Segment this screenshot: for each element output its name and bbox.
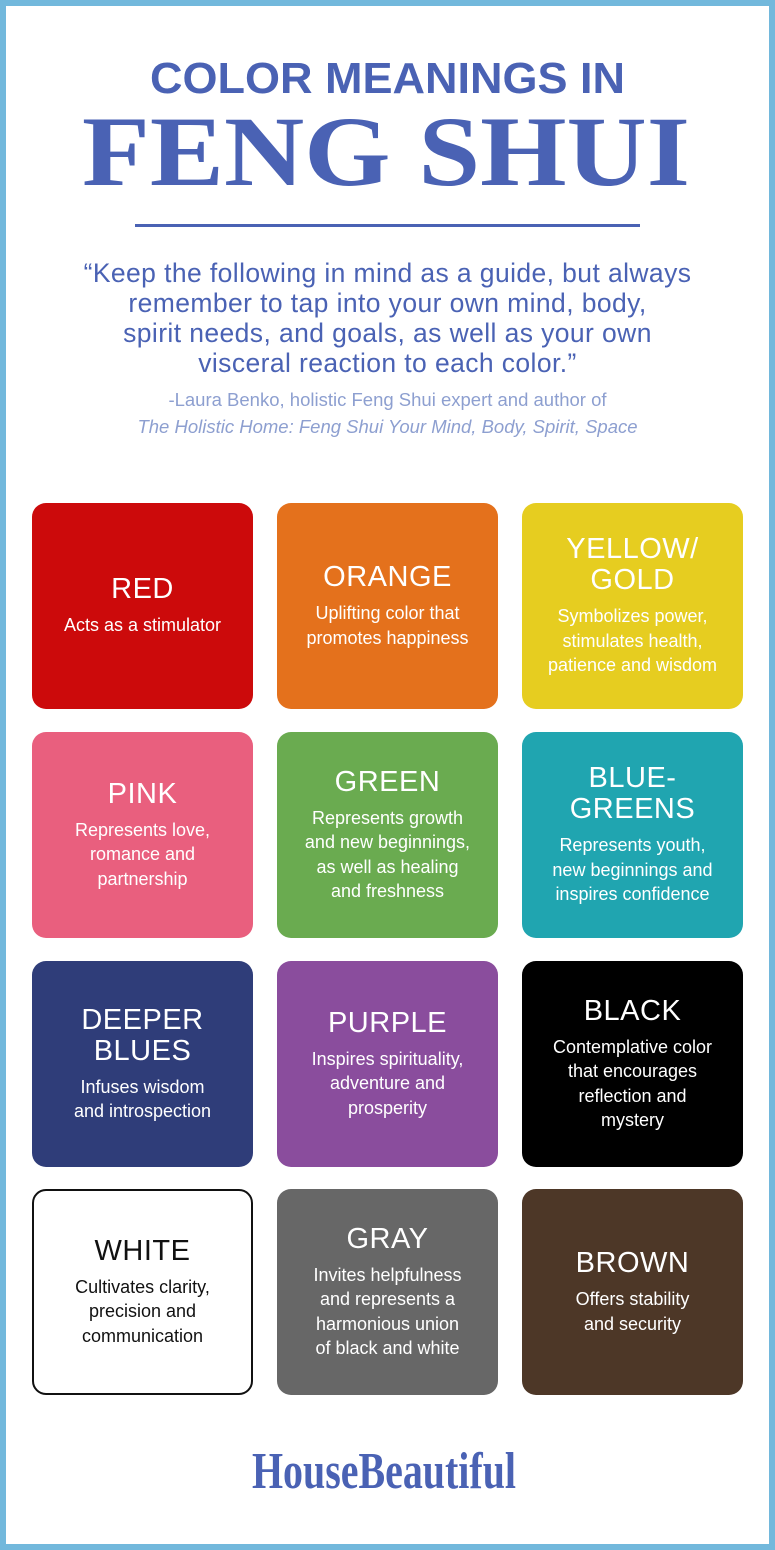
card: orange (277, 503, 498, 709)
card: black (522, 961, 743, 1167)
card: pink: partnership (97, 869, 188, 889)
divider (135, 224, 640, 227)
card: purple (277, 961, 498, 1167)
card: brown: BROWN (576, 1247, 689, 1279)
card: brown: Offers stability (576, 1289, 689, 1309)
card: gray: and represents a (320, 1289, 455, 1309)
card: blue-greens: BLUE- (589, 762, 676, 794)
card: yellow: YELLOW/ (566, 533, 699, 565)
card: gray: of black and white (315, 1338, 460, 1358)
card: black: reflection and (578, 1086, 687, 1106)
attribution: -Laura Benko, holistic Feng Shui expert and author of (168, 389, 607, 410)
card: purple: Inspires spirituality, (312, 1049, 463, 1069)
quote: remember to tap into your own mind, body, (128, 288, 647, 318)
card: green (277, 732, 498, 938)
card: white: communication (82, 1326, 203, 1346)
card: red: RED (111, 573, 174, 605)
card: green: as well as healing (316, 856, 459, 876)
card: deeper blues: BLUES (94, 1034, 191, 1066)
card: deeper blues: Infuses wisdom (80, 1076, 205, 1096)
card: yellow: GOLD (590, 564, 675, 596)
quote: spirit needs, and goals, as well as your own (123, 318, 652, 348)
card: pink: romance and (90, 844, 195, 864)
card: deeper blues: DEEPER (81, 1004, 204, 1036)
card: black: mystery (601, 1110, 664, 1130)
card: orange: promotes happiness (306, 628, 469, 648)
title line 2: FENG SHUI (82, 96, 690, 207)
card: purple: adventure and (330, 1073, 445, 1093)
card: orange: Uplifting color that (315, 603, 460, 623)
card: blue-greens: Represents youth, (559, 835, 706, 855)
card: purple: prosperity (348, 1098, 427, 1118)
card: yellow: patience and wisdom (548, 655, 717, 675)
attribution: The Holistic Home: Feng Shui Your Mind, Body, Spirit, Space (137, 416, 638, 437)
card: purple: PURPLE (328, 1007, 447, 1039)
card: green: GREEN (335, 766, 440, 798)
card: pink (32, 732, 253, 938)
card: white: precision and (89, 1301, 196, 1321)
card: blue-greens: new beginnings and (552, 860, 713, 880)
card: brown (522, 1189, 743, 1395)
card: deeper blues (32, 961, 253, 1167)
card: white: WHITE (95, 1235, 190, 1267)
card: green: and new beginnings, (305, 832, 470, 852)
title (82, 54, 690, 227)
logo: HouseBeautiful (252, 1443, 516, 1500)
card: red (32, 503, 253, 709)
card: white: Cultivates clarity, (75, 1277, 210, 1297)
card: black: Contemplative color (553, 1036, 712, 1056)
card: black: that encourages (568, 1061, 697, 1081)
card: green: and freshness (331, 881, 444, 901)
title line 1: COLOR MEANINGS IN (150, 54, 625, 103)
card: yellow: stimulates health, (562, 631, 703, 651)
card: brown: and security (584, 1314, 681, 1334)
card: black: BLACK (584, 994, 681, 1026)
card: blue-greens (522, 732, 743, 938)
quote: “Keep the following in mind as a guide, but always (84, 258, 691, 288)
card: blue-greens: inspires confidence (555, 884, 710, 904)
quote (84, 258, 691, 378)
card: deeper blues: and introspection (74, 1101, 211, 1121)
card: red: Acts as a stimulator (64, 615, 221, 635)
quote: visceral reaction to each color.” (198, 348, 577, 378)
card: green: Represents growth (312, 808, 463, 828)
card: orange: ORANGE (323, 561, 452, 593)
card: yellow: Symbolizes power, (557, 606, 708, 626)
card: pink: Represents love, (75, 820, 210, 840)
card: gray (277, 1189, 498, 1395)
attribution (137, 389, 638, 437)
card: gray: GRAY (346, 1222, 429, 1254)
card: blue-greens: GREENS (570, 793, 695, 825)
card: pink: PINK (108, 778, 177, 810)
card: gray: harmonious union (316, 1314, 459, 1334)
card: white (32, 1189, 253, 1395)
card: gray: Invites helpfulness (313, 1264, 462, 1284)
card: yellow (522, 503, 743, 709)
